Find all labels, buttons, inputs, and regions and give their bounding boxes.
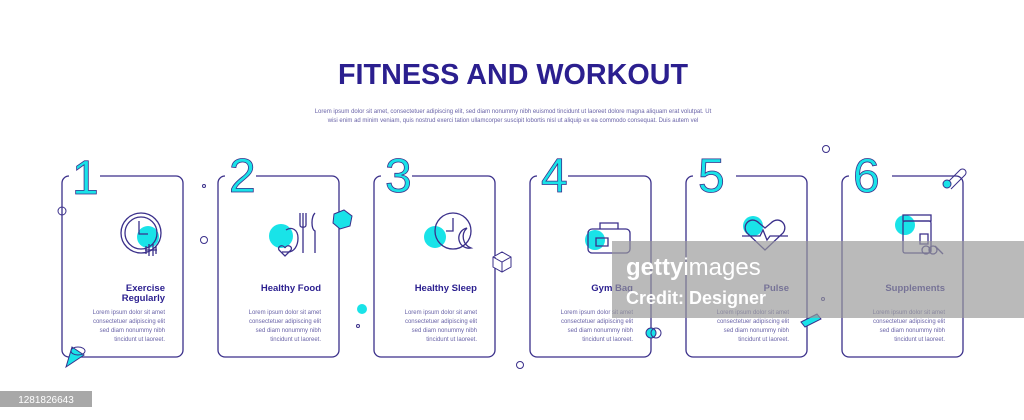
panel 5: pulse: Pulse — [764, 283, 789, 294]
panel 3: healthy sleep: tincidunt ut laoreet. — [426, 337, 477, 343]
panel 6: supplements: consectetuer adipiscing elit — [873, 319, 945, 325]
panel 5: pulse: consectetuer adipiscing elit — [717, 319, 789, 325]
panel 4: gym bag: 4 — [541, 150, 568, 203]
panel 2: healthy food: tincidunt ut laoreet. — [270, 337, 321, 343]
panel 6: supplements: sed diam nonummy nibh — [880, 328, 945, 334]
icon: heart pulse — [742, 216, 788, 250]
panel 3: healthy sleep: 3 — [385, 150, 412, 203]
icon: clock and moon — [424, 213, 471, 249]
icon: gym bag — [585, 223, 630, 253]
panel 1: exercise regularly: tincidunt ut laoreet. — [114, 337, 165, 343]
panel 4: gym bag — [530, 150, 651, 357]
panel 4: gym bag: Lorem ipsum dolor sit amet — [561, 310, 633, 316]
subtitle text: wisi enim ad minim veniam, quis nostrud exerci tation ullamcorper suscipit lobortis nisl ut aliquip ex ea commodo consequat. Duis autem vel — [327, 118, 698, 124]
watermark banner — [612, 241, 1024, 318]
image id badge — [0, 391, 92, 407]
panel 6: supplements: 6 — [853, 150, 880, 203]
panel 4: gym bag: tincidunt ut laoreet. — [582, 337, 633, 343]
panel 5: pulse: 5 — [698, 150, 725, 203]
panel 2: healthy food: 2 — [229, 150, 256, 203]
panel 6: supplements — [842, 150, 963, 357]
panel 6: supplements: Lorem ipsum dolor sit amet — [873, 310, 945, 316]
icon: supplement bottle — [895, 215, 943, 254]
panel 2: healthy food: consectetuer adipiscing elit — [249, 319, 321, 325]
watermark banner: Credit: Designer — [626, 288, 766, 308]
panel 3: healthy sleep: Healthy Sleep — [415, 283, 477, 294]
panel 5: pulse: Lorem ipsum dolor sit amet — [717, 310, 789, 316]
panel 3: healthy sleep — [374, 150, 495, 357]
panel 4: gym bag: Gym Bag — [591, 283, 633, 294]
panel 1: exercise regularly: consectetuer adipiscing elit — [93, 319, 165, 325]
panel 3: healthy sleep: consectetuer adipiscing elit — [405, 319, 477, 325]
panel 1: exercise regularly — [62, 152, 183, 357]
panel 1: exercise regularly: Exercise — [126, 283, 165, 294]
panel 2: healthy food: sed diam nonummy nibh — [256, 328, 321, 334]
subtitle text — [315, 109, 712, 124]
panel 5: pulse: sed diam nonummy nibh — [724, 328, 789, 334]
panel 3: healthy sleep: sed diam nonummy nibh — [412, 328, 477, 334]
subtitle text: Lorem ipsum dolor sit amet, consectetuer adipiscing elit, sed diam nonummy nibh euismod tincidunt ut laoreet dolore magna aliquam erat volutpat. Ut — [315, 109, 712, 115]
watermark banner: gettyimages — [626, 254, 761, 281]
panel 6: supplements: tincidunt ut laoreet. — [894, 337, 945, 343]
icon: apple and cutlery — [269, 213, 315, 256]
panel 1: exercise regularly: Regularly — [122, 293, 166, 304]
panel 2: healthy food: Lorem ipsum dolor sit amet — [249, 310, 321, 316]
decorative shapes — [58, 146, 966, 368]
title: FITNESS AND WORKOUT — [338, 59, 688, 91]
panel 5: pulse — [686, 150, 807, 357]
panel 5: pulse: tincidunt ut laoreet. — [738, 337, 789, 343]
panel 1: exercise regularly: sed diam nonummy nibh — [100, 328, 165, 334]
panel 4: gym bag: sed diam nonummy nibh — [568, 328, 633, 334]
panel 2: healthy food — [218, 150, 339, 357]
icon: clock with dumbbell — [121, 213, 161, 256]
panel 2: healthy food: Healthy Food — [261, 283, 321, 294]
panel 3: healthy sleep: Lorem ipsum dolor sit amet — [405, 310, 477, 316]
image id badge: 1281826643 — [18, 395, 74, 406]
panel 1: exercise regularly: Lorem ipsum dolor sit amet — [93, 310, 165, 316]
panel 1: exercise regularly: 1 — [72, 152, 99, 205]
panel 6: supplements: Supplements — [885, 283, 945, 294]
panel 4: gym bag: consectetuer adipiscing elit — [561, 319, 633, 325]
